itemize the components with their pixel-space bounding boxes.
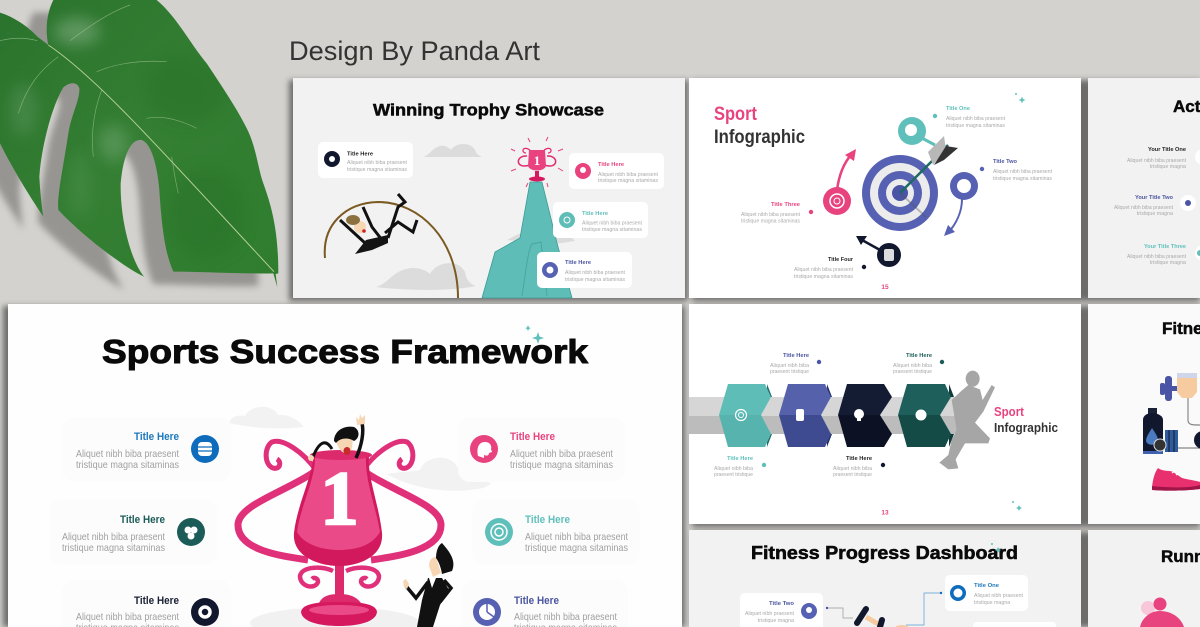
callout: card 2 [569,153,664,189]
icon: pie circle with arrow, label Title Two: Aliquet nibh biba praesent [993,169,1052,175]
icon: navy database circle with arrow, label Title Four: Title Four [828,257,854,263]
panel: Sports Success Framework main slide [8,304,682,627]
icon: navy database circle with arrow, label Title Four [794,236,901,280]
heading: Sport Infographic: Infographic [994,420,1058,435]
callout: Title One card [945,575,1028,611]
title fragment: Act [1173,97,1200,116]
title: Fitness Progress Dashboard: Fitness Progress Dashboard [751,543,1018,563]
callout: Title One card: Aliquet nibh praesent [974,593,1024,599]
card: right row 3: Aliquet nibh biba praesent [514,611,617,623]
card: left row 2 [50,499,217,565]
label: green step: Title Here [906,353,932,359]
icon: pink target circle with arrow, label Title Three: Title Three [771,202,800,208]
numeral 1: 1 [320,457,358,541]
callout: card 3: tristique magna sitaminas [582,227,642,233]
card: left row 2: tristique magna sitaminas [62,542,165,554]
icon: sparkles [1012,501,1022,511]
callout: card 3: Aliquet nibh biba praesent [582,220,643,226]
list item three: Your Title Three [1144,244,1186,250]
list item two [1114,195,1196,217]
step 1 hexagon: teal [719,384,772,447]
label: navy step: Title Here [846,456,872,462]
label: green step: Aliquet nibh biba [893,363,932,369]
icon: small trophy with rays [511,137,563,187]
icon: blue can and wheel [1154,430,1200,452]
card: left row 2: Title Here [120,514,165,526]
handles [238,441,441,587]
panel: Winning Trophy Showcase slide [293,78,685,298]
list item one: Your Title One [1148,147,1186,153]
icon: sparkles [991,543,1001,553]
card: right row 3: Title Here [514,595,559,607]
card: right row 1 [458,417,625,482]
icon: head circle with label Title One: Aliquet nibh biba praesent [946,116,1005,122]
card: left row 2: Aliquet nibh biba praesent [62,531,165,543]
title: Sports Success Framework: Sports Success Framework [102,333,589,370]
callout: Title One card: Title One [974,583,999,589]
card: right row 1: Title Here [510,431,555,443]
label: blue step: praesent tristique [770,369,809,375]
list item one: tristique magna [1150,164,1186,170]
list item two: Your Title Two [1135,195,1174,201]
callout: Title Two card [740,593,823,627]
label: blue step: Title Here [783,353,809,359]
card: left row 1: Aliquet nibh biba praesent [76,448,179,460]
clouds [376,144,575,290]
icon: arrow in target [900,136,958,217]
card: left row 1: tristique magna sitaminas [76,459,179,471]
label: teal step: praesent tristique [714,472,753,478]
callout: card 4: Title Here [565,260,591,266]
callout: card 1 [318,142,413,178]
callout: card 4: Aliquet nibh biba praesent [565,270,626,276]
icon: teal cliff [482,182,572,298]
icon: water bottle [1143,408,1163,454]
panel: Sport Infographic chevron slide [689,304,1081,524]
icon: pie circle with arrow, label Title Two: Title Two [993,159,1018,165]
callout: card 4: tristique magna sitaminas [565,277,625,283]
heading: Design By Panda Art: Design By Panda Art [289,36,540,66]
icon: pink target circle with arrow, label Title Three [741,149,856,224]
stem and base [335,564,344,596]
icon: small trophy with rays: 1 [534,153,540,168]
panel: Fitness slide (cropped) [1088,304,1200,524]
label: blue step [770,353,821,375]
icon: pink runner [1140,598,1184,627]
list item one [1127,147,1200,170]
list item two: Aliquet nibh biba praesent [1114,205,1173,211]
heading: Sport Infographic: Sport [714,104,758,125]
callout: card 3: Title Here [582,211,608,217]
connectors [826,592,942,625]
label: navy step: Aliquet nibh biba [833,466,872,472]
icon: pole and vaulter [325,194,458,298]
card: right row 1: Aliquet nibh biba praesent [510,448,613,460]
label: blue step: Aliquet nibh biba [770,363,809,369]
icon: sparkles [1015,93,1026,104]
callout: card 3 [553,202,648,238]
grey band [689,397,969,434]
callout: third card top edge [973,622,1056,627]
callout: card 4 [537,252,632,288]
icon: head circle with label Title One: tristique magna sitaminas [946,123,1005,129]
panel: Running slide (cropped) [1088,530,1200,627]
heading: Sport Infographic: Infographic [714,127,805,148]
step 2 hexagon: blue [779,384,832,447]
callout: card 2: Title Here [598,162,624,168]
card: right row 2: tristique magna sitaminas [525,542,628,554]
title: Winning Trophy Showcase: Winning Trophy Showcase [373,102,604,120]
panel: Fitness Progress Dashboard slide [689,530,1081,627]
icon: monstera leaf [0,0,278,289]
icon: dumbbell and hand [1160,373,1200,448]
card: right row 3 [462,580,628,627]
list item two: tristique magna [1137,211,1173,217]
icon: man climbing out of trophy [308,414,365,461]
label: navy step [833,456,885,478]
icon: dumbbell [857,609,909,627]
card: left row 1 [62,417,231,482]
icon: target [862,155,938,231]
icon: pink target circle with arrow, label Title Three: tristique magna sitaminas [741,218,800,224]
callout: card 2: Aliquet nibh biba praesent [598,172,659,178]
icon: navy database circle with arrow, label Title Four: Aliquet nibh biba praesent [794,267,853,273]
card: left row 3: Aliquet nibh biba praesent [76,611,179,623]
icon: runner silhouette [939,371,995,469]
list item one: Aliquet nibh biba praesent [1127,158,1186,164]
callout: Title Two card: tristique magna [758,618,794,624]
list item three [1127,244,1200,266]
callout: Title Two card: Title Two [769,601,795,607]
card: left row 3: Title Here [134,595,179,607]
panel: Sport Infographic target slide [689,78,1081,298]
label: green step: praesent tristique [893,369,932,375]
icon: head circle with label Title One: Title One [946,106,970,112]
card: left row 3 [62,580,231,627]
icon: navy database circle with arrow, label Title Four: tristique magna sitaminas [794,274,853,280]
icon: pink shoe [1152,468,1200,491]
icon: head circle with label Title One [898,106,1005,145]
label: teal step: Title Here [727,456,753,462]
page number 13: 13 [881,510,889,516]
panel: Act slide (cropped) [1088,78,1200,298]
card: right row 2: Aliquet nibh biba praesent [525,531,628,543]
list item three: Aliquet nibh biba praesent [1127,254,1186,260]
card: right row 1: tristique magna sitaminas [510,459,613,471]
callout: card 1: Title Here [347,152,373,158]
shadow under trophy [250,607,420,627]
card: right row 2: Title Here [525,514,570,526]
label: green step [893,353,944,375]
list item three: tristique magna [1150,260,1186,266]
page number 15: 15 [881,284,889,291]
callout: Title Two card: Aliquet nibh praesent [745,611,795,617]
heading: Sport Infographic [994,404,1058,435]
icon: pink target circle with arrow, label Title Three: Aliquet nibh biba praesent [741,212,800,218]
icon: man looking up [403,543,453,627]
heading: Sport Infographic [714,104,805,148]
callout: card 1: Aliquet nibh biba praesent [347,160,408,166]
label: teal step [714,456,766,478]
callout: card 2: tristique magna sitaminas [598,178,658,184]
heading: Sport Infographic: Sport [994,404,1025,419]
step 4 hexagon: green [898,384,954,447]
step 3 hexagon: navy [838,384,892,447]
icon: pie circle with arrow, label Title Two [944,159,1052,236]
label: navy step: praesent tristique [833,472,872,478]
clouds [229,407,491,491]
cup [294,457,382,566]
card: left row 1: Title Here [134,431,179,443]
icon: sparkles [525,325,544,344]
icon: pie circle with arrow, label Title Two: tristique magna sitaminas [993,176,1052,182]
card: right row 2 [472,499,640,565]
icon: large pink trophy [238,441,441,626]
callout: card 1: tristique magna sitaminas [347,167,407,173]
callout: Title One card: tristique magna [974,600,1010,606]
label: teal step: Aliquet nibh biba [714,466,753,472]
